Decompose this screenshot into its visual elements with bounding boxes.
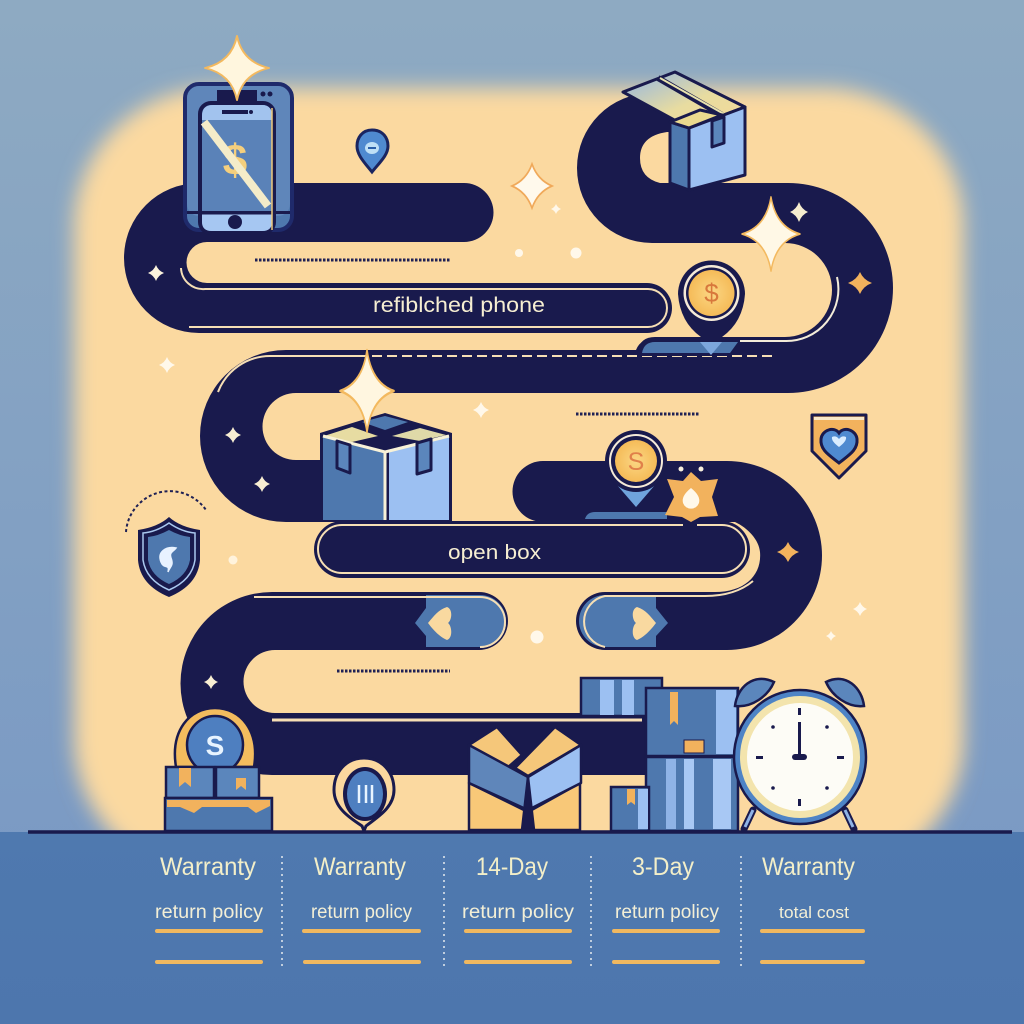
column 5: warranty total cost: Warranty [762, 853, 855, 881]
icon: parcel on road [623, 72, 745, 190]
column 4: 3-day [614, 853, 719, 962]
icon: warranty shield [126, 491, 206, 597]
column 5: warranty total cost [762, 853, 863, 962]
column 1: warranty [155, 853, 264, 962]
column 3: 14-day [462, 853, 575, 962]
icon: sparkle above open box [340, 350, 394, 432]
icon: opened parcel [469, 727, 581, 830]
road outlines and guide lines [181, 268, 838, 720]
icon: coin map pin [585, 430, 667, 519]
icon: open cardboard box [320, 413, 452, 522]
dotted captions [255, 260, 700, 671]
column 2: warranty [304, 853, 419, 962]
icon: alarm clock [734, 679, 866, 829]
icon: parcel stack [581, 678, 738, 831]
icon: heart shield badge [812, 415, 866, 478]
column 5: warranty total cost: total cost [779, 903, 849, 922]
peach glow panel [74, 88, 964, 878]
blue chevron cap: right [579, 595, 668, 647]
road segment: S curve and middle row [200, 88, 893, 522]
column 1: warranty: return policy [155, 902, 264, 923]
icon: coin on parcels [165, 708, 272, 831]
label: refurbished phone: refiblched phone [373, 294, 545, 317]
column 4: 3-day: 3-Day [632, 853, 694, 881]
road segment: refurbished phone [124, 183, 672, 333]
icon: phone with dollar [185, 84, 292, 233]
icon: coin map pin: S [628, 448, 644, 476]
icon: dollar map pin on road: $ [704, 278, 719, 308]
icon: large sparkle on curve [742, 197, 800, 271]
icon: orange badge [665, 466, 718, 522]
column 1: warranty: Warranty [160, 853, 256, 881]
icon: phone with dollar: $ [223, 136, 247, 185]
icon: sparkle above phone [205, 36, 269, 100]
road segment: lower right curve [512, 461, 822, 650]
blue chevron cap: left [415, 595, 506, 647]
icon: outlined sparkle [512, 164, 552, 208]
bottom info band [0, 832, 1024, 1024]
column 2: warranty: return policy [311, 902, 412, 923]
label: open box: open box [448, 542, 541, 564]
pill: open box label [314, 521, 750, 578]
small sparkles and dots [148, 202, 872, 689]
icon: coin on parcels: S [206, 730, 224, 761]
icon: small location pin [357, 130, 388, 172]
column 4: 3-day: return policy [615, 902, 719, 923]
icon: seal pin [334, 758, 394, 831]
icon: dollar map pin on road [638, 260, 745, 356]
column 2: warranty: Warranty [314, 853, 406, 881]
ground line [28, 830, 1012, 834]
column 3: 14-day: 14-Day [476, 853, 548, 881]
road segment: bottom curve [180, 592, 655, 775]
column dividers [282, 856, 741, 966]
column 3: 14-day: return policy [462, 902, 575, 923]
